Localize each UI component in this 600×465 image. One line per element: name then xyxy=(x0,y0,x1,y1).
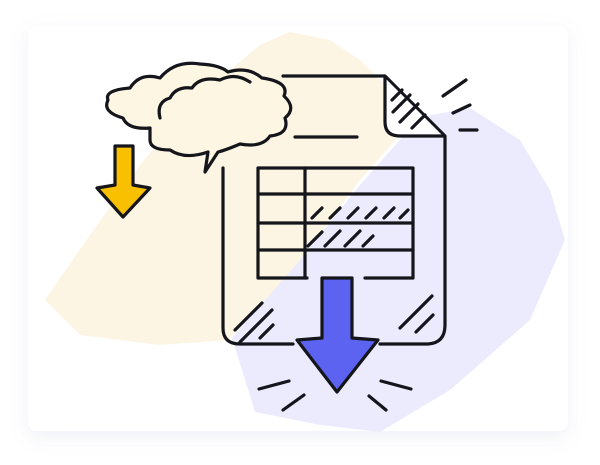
card xyxy=(28,26,568,431)
cloud xyxy=(107,63,291,172)
blue wash xyxy=(232,108,565,432)
table xyxy=(258,168,413,278)
rays xyxy=(259,80,477,410)
yellow wash xyxy=(45,32,420,345)
document outline xyxy=(223,76,445,344)
blue arrow xyxy=(297,278,378,392)
yellow arrow xyxy=(97,146,150,217)
